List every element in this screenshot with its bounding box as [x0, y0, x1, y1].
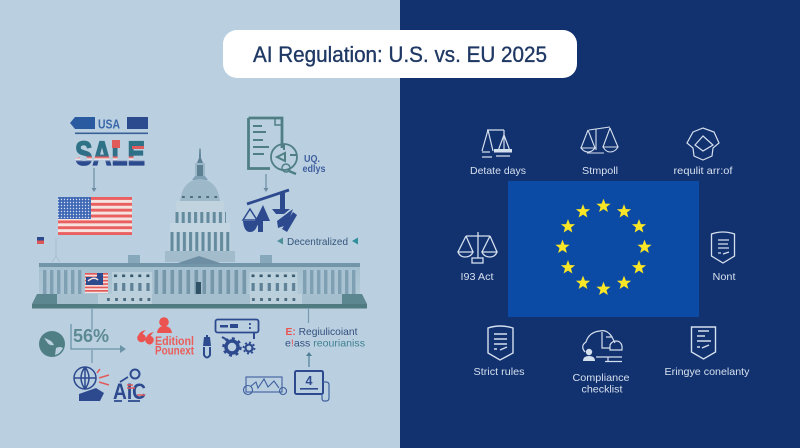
icon: red quote marks [137, 330, 154, 346]
icon: server panel [216, 320, 258, 341]
stylised word: SALE: SALE [75, 135, 145, 173]
icon: badge [687, 128, 719, 160]
base slab [32, 304, 367, 308]
label: UQ. edlys [302, 153, 326, 175]
icon: globe [39, 331, 65, 357]
icon: gears [224, 338, 254, 356]
icon: shield, Strict rules [488, 326, 513, 360]
label: Detate days: Detate days [470, 165, 526, 177]
icon: tool [203, 335, 211, 358]
USA banner: USA [98, 116, 120, 132]
label: requlit arr:of: requlit arr:of [674, 165, 733, 177]
label: UQ. edlys: edlys [302, 164, 326, 175]
panel: U.S. background [0, 0, 400, 448]
icon: scales, Stmpoll [581, 127, 618, 153]
connector: building to regulation text [308, 308, 310, 323]
label: Eringye conelanty: Eringye conelanty [664, 366, 750, 378]
icon: numbered tablet [295, 371, 329, 401]
main body [39, 267, 360, 295]
EU flag [508, 181, 699, 317]
illustration: Capitol building [32, 148, 367, 308]
label: Compliance checklist: checklist [582, 384, 623, 396]
stat: 56%: 56% [73, 326, 109, 346]
text: regulation note: e!ass reourianiss [285, 338, 365, 350]
icon: scales and gavel [243, 190, 297, 232]
icon: scales, Detate days [482, 130, 512, 157]
dome [165, 148, 235, 262]
text: Editionl Pounext: Editionl [155, 334, 194, 348]
text: regulation note: E: Regiulicoiant [286, 326, 358, 338]
text: regulation note [285, 326, 365, 350]
arrow: SALE to flag [92, 168, 96, 192]
panel: EU background [400, 0, 800, 448]
lower steps [57, 294, 343, 304]
text: Editionl Pounext [155, 334, 194, 358]
icon: globe with rays [74, 367, 109, 401]
stylised word: AIC: AIC [113, 379, 146, 404]
stylised word: AIC [113, 370, 146, 404]
wing cupolas [128, 255, 272, 263]
title card [223, 30, 577, 78]
USA banner [70, 116, 148, 134]
icon: red person [157, 317, 172, 333]
icon: machine chart [244, 377, 286, 394]
label: Strict rules: Strict rules [474, 366, 524, 378]
flag on building [85, 273, 108, 293]
central pediment [175, 256, 223, 264]
icon: small flag on pole [37, 237, 60, 262]
label: I93 Act: I93 Act [460, 271, 494, 283]
label: Stmpoll: Stmpoll [582, 165, 618, 177]
icon: shield, Nont [712, 232, 734, 263]
arrow: up to regulation text [306, 352, 312, 367]
label: Compliance checklist: Compliance [572, 372, 630, 384]
text: Editionl Pounext: Pounext [155, 344, 194, 358]
icon: cloud and person [583, 331, 622, 362]
title card: AI Regulation: U.S. vs. EU 2025 [253, 42, 547, 67]
icon: scales, I93 Act [458, 232, 497, 263]
arrow: document to scales [264, 174, 268, 192]
connector: building to stat [91, 308, 93, 363]
icon: numbered tablet: 4 [306, 374, 313, 388]
icon: shield, Eringye conelanty [692, 327, 716, 359]
label: Nont: Nont [712, 271, 736, 283]
label: Decentralized: Decentralized [287, 236, 348, 248]
icon: American flag [58, 197, 132, 235]
icon: document with globe and magnifier [248, 118, 297, 174]
label: Compliance checklist [572, 372, 630, 396]
label: UQ. edlys: UQ. [304, 153, 320, 165]
arrow: stat [71, 324, 126, 353]
